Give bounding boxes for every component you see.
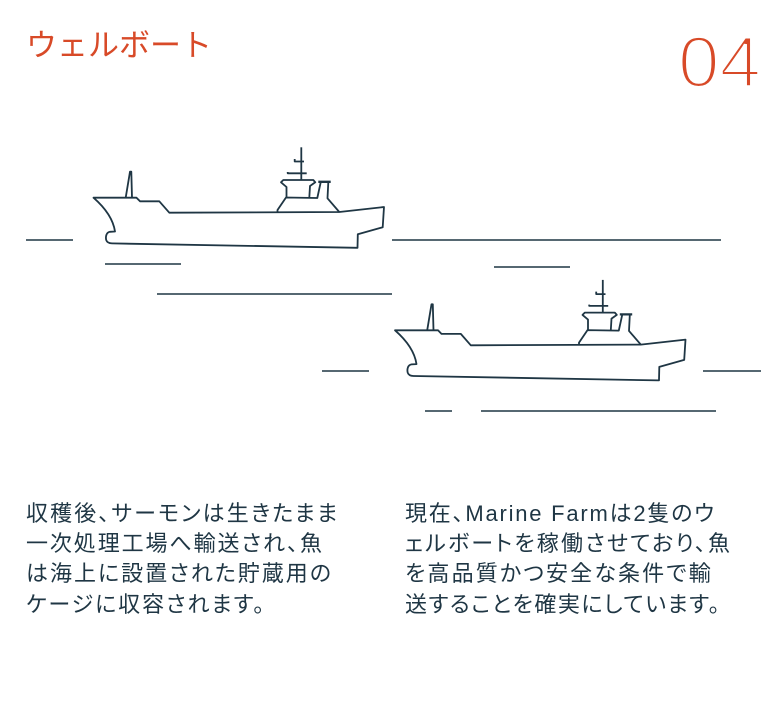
text block: right column: を高品質かつ安全な条件で輸 <box>405 561 713 586</box>
text block: right column: 送することを確実にしています。 <box>405 592 721 617</box>
text block: right column: ェルボートを稼働させており、魚 <box>405 531 732 556</box>
text block: left column: ケージに収容されます。 <box>26 592 266 617</box>
text block: left column: は海上に設置された貯蔵用の <box>26 561 333 586</box>
ship 1 <box>94 147 384 248</box>
text block: left column <box>26 501 339 617</box>
text block: right column: 現在、Marine Farmは2隻のウ <box>405 501 716 526</box>
section number: 04 <box>678 23 761 103</box>
text block: left column: 一次処理工場へ輸送され、魚 <box>26 531 324 556</box>
title: ウェルボート <box>26 20 212 65</box>
text block: right column <box>405 501 732 617</box>
ship 2 <box>395 280 686 380</box>
text block: left column: 収穫後、サーモンは生きたまま <box>26 501 339 526</box>
water lines <box>26 240 761 411</box>
